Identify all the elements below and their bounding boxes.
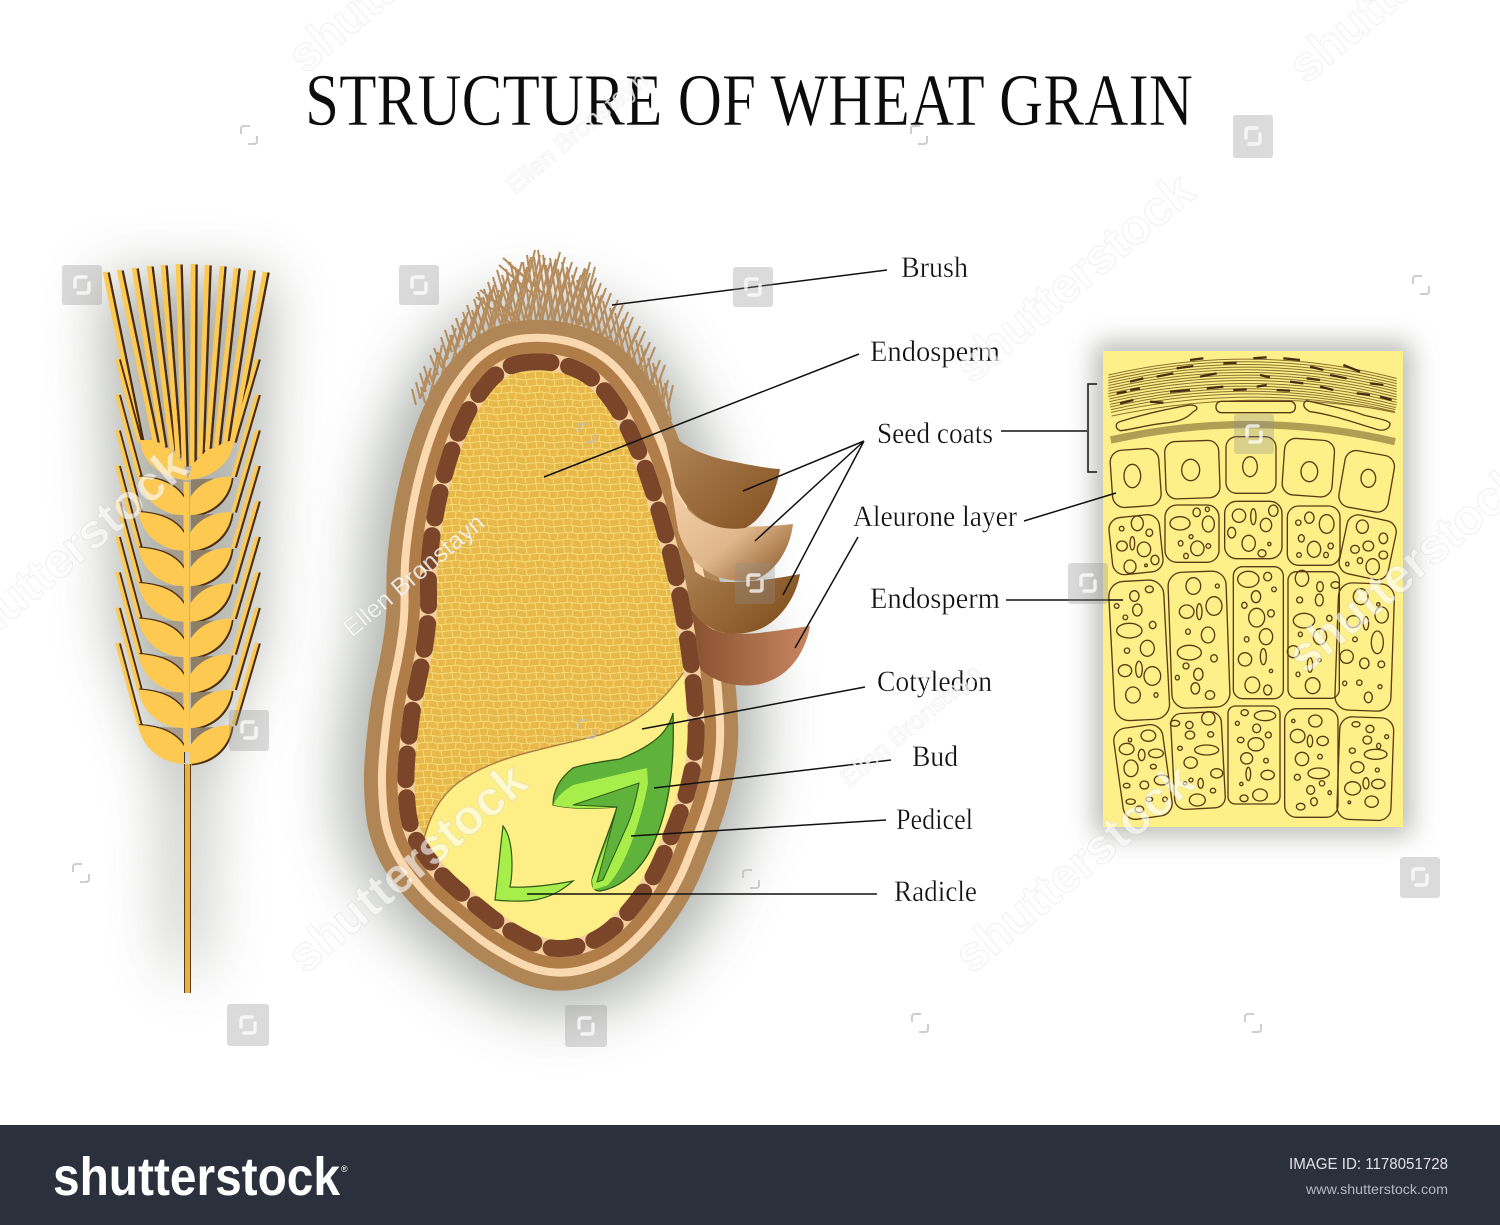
seed coat dark fibres (1117, 357, 1392, 403)
radicle (495, 826, 573, 901)
title: STRUCTURE OF WHEAT GRAIN (305, 60, 1193, 142)
compressed coat band (1111, 425, 1395, 442)
aleurone ring (406, 362, 696, 949)
wheat stem (184, 482, 191, 993)
grain shadow (406, 362, 696, 949)
wheat ear illustration (105, 264, 269, 993)
small watermark marks (73, 126, 1429, 1032)
seed coat elongated cells (1116, 401, 1390, 431)
watermark text: shutterstock (944, 163, 1205, 393)
watermark text: Ellen Bronstayn (835, 659, 987, 793)
label: Aleurone layer: Aleurone layer (853, 500, 1017, 533)
watermark text: shutterstock (944, 753, 1205, 983)
seed coat flaps (662, 425, 810, 685)
aleurone cells (406, 362, 696, 949)
label: Seed coats: Seed coats (877, 417, 993, 450)
aleurone cells (1109, 437, 1396, 514)
wheat ear shadow (105, 280, 268, 970)
label: Radicle: Radicle (894, 875, 977, 908)
endosperm (406, 362, 696, 949)
grain cream layer (406, 362, 696, 949)
grain inner coat (406, 362, 696, 949)
watermark tiles (62, 115, 1440, 1047)
website: www.shutterstock.com (1305, 1181, 1448, 1197)
watermark text: shutterstock (277, 753, 538, 983)
endosperm cell walls (1108, 501, 1398, 821)
label: Endosperm top: Endosperm (870, 335, 1000, 368)
label: Cotyledon: Cotyledon (877, 665, 992, 698)
watermark text: Ellen Bronstayn (501, 66, 653, 200)
label: Bud: Bud (912, 740, 958, 773)
panel background (1103, 351, 1403, 827)
cotyledon (424, 672, 688, 940)
registered mark: ® (341, 1164, 348, 1174)
label: Pedicel: Pedicel (896, 803, 973, 836)
endosperm starch granules (1114, 505, 1389, 813)
bud inner (573, 783, 639, 882)
seed coat striations (1108, 359, 1397, 416)
cell structure panel (1095, 343, 1411, 835)
wheat awns (105, 264, 269, 726)
footer logo: shutterstock (53, 1147, 341, 1207)
footer bar (0, 1125, 1500, 1225)
label: Endosperm lower: Endosperm (870, 582, 1000, 615)
leader lines (527, 270, 1123, 894)
pedicel (553, 768, 648, 890)
grain outer coat (406, 362, 696, 949)
grain cross-section (380, 250, 810, 1010)
image id: IMAGE ID: 1178051728 (1289, 1156, 1448, 1173)
bud (553, 713, 673, 891)
label: Brush: Brush (901, 251, 968, 284)
panel shadow (1095, 343, 1411, 835)
watermark text: Ellen Bronstayn (338, 509, 490, 643)
wheat grains (138, 476, 234, 766)
brush hairs (412, 250, 673, 422)
